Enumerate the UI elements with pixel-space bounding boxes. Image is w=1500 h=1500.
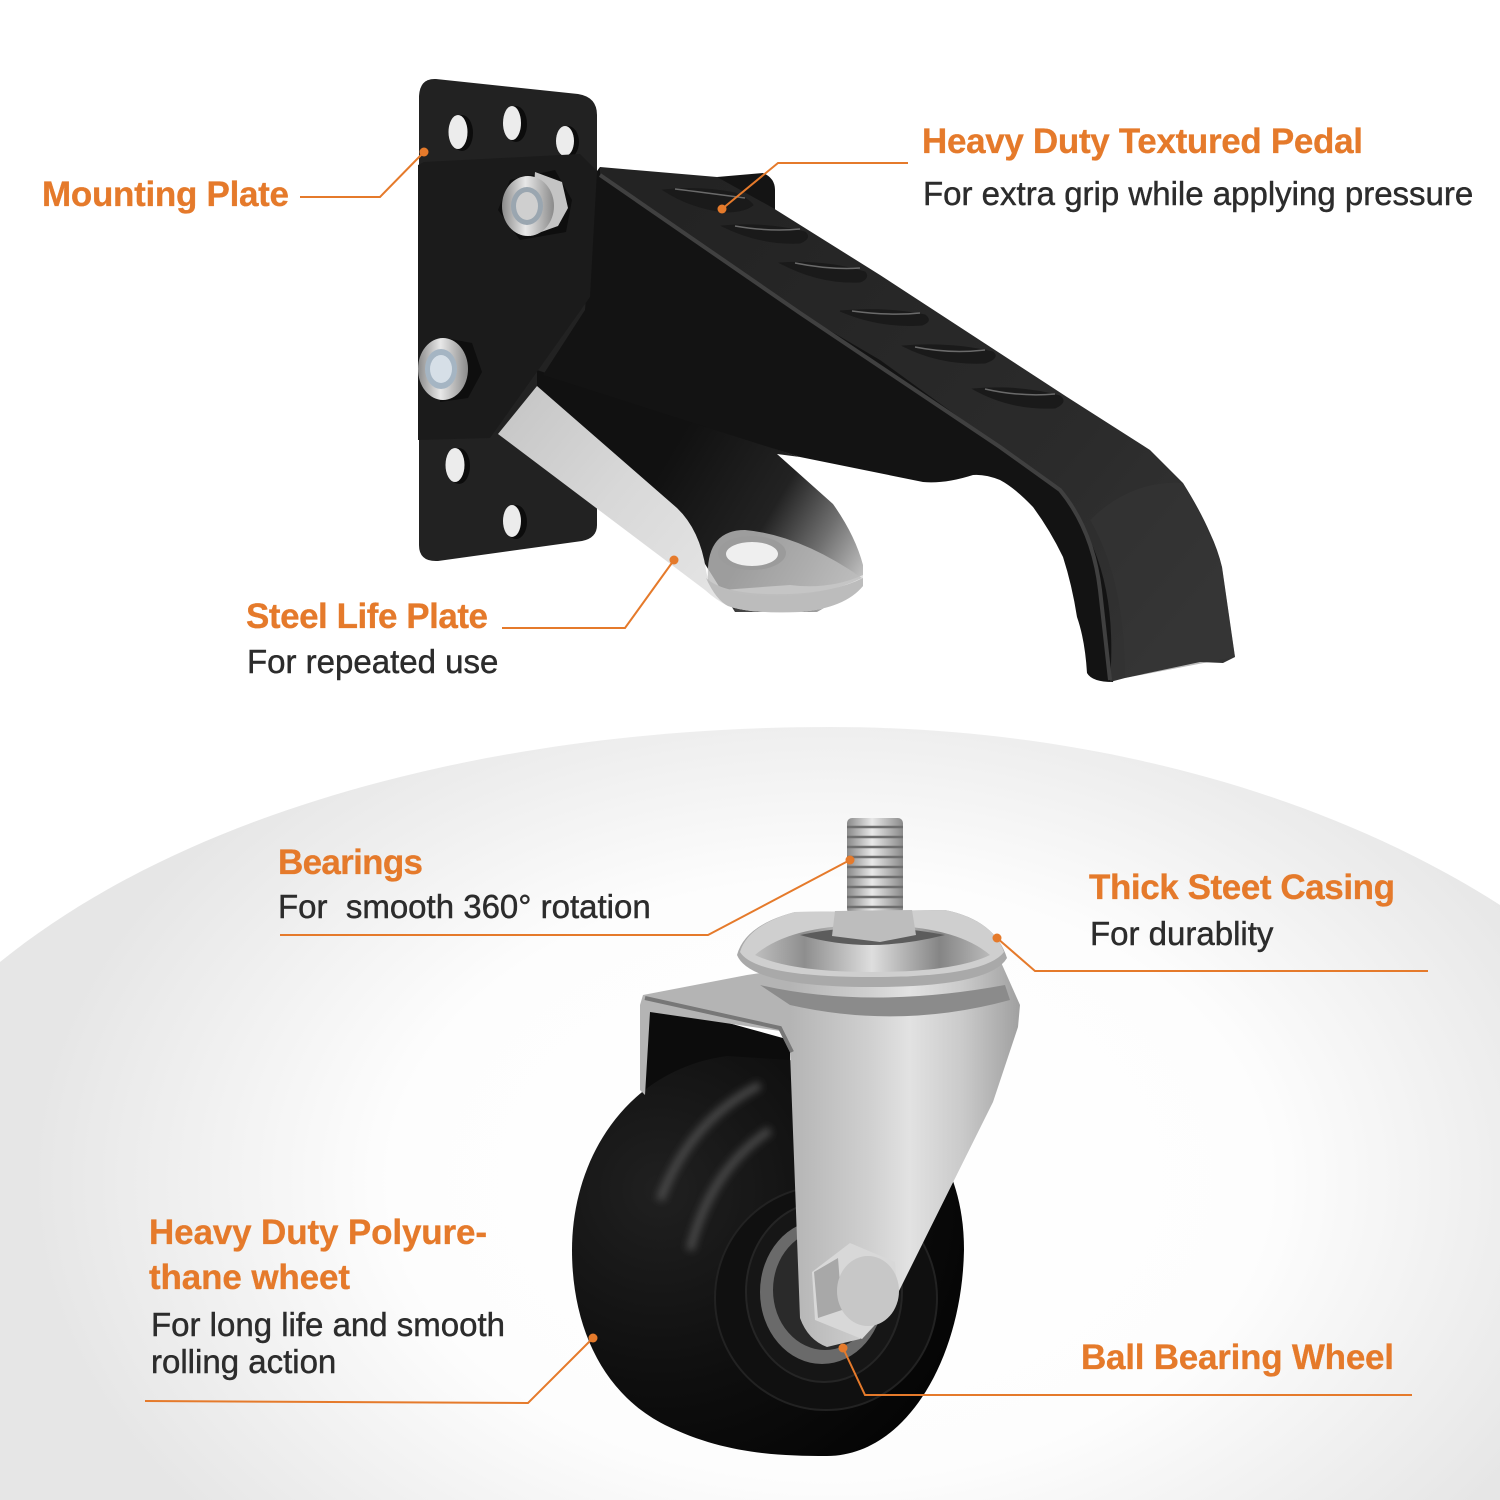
- wheel tyre: [572, 1056, 964, 1456]
- swivel bracket casing: [640, 960, 1020, 1347]
- callout: ball bearing wheel: Ball Bearing Wheel: [1081, 1338, 1394, 1377]
- callout: textured pedal: Heavy Duty Textured Pedal: [922, 122, 1363, 161]
- front plate: [418, 154, 597, 440]
- callout: ball bearing wheel: [838, 1338, 1412, 1395]
- stud thread: [847, 818, 903, 914]
- callout: polyurethane wheel: [145, 1213, 598, 1403]
- pedal end shading: [1090, 483, 1235, 678]
- casing shadow under washer: [760, 985, 1010, 1016]
- tyre highlights: [660, 1085, 770, 1250]
- lift plate tip rim: [706, 578, 863, 612]
- callout: steel casing: Thick Steet Casing: [1089, 868, 1395, 907]
- wheel hub rings: [715, 1186, 937, 1410]
- callout: polyurethane wheel: For long life and smooth: [151, 1306, 505, 1343]
- bracket rear opening: [645, 1000, 790, 1100]
- callout: bearings: Bearings: [278, 843, 423, 882]
- bolt: lower: [418, 338, 482, 402]
- steel lift plate: silver strip: [498, 386, 863, 612]
- stud nut: [832, 910, 916, 942]
- background dome: [0, 727, 1500, 1500]
- illustration: pedal bracket: [418, 79, 1235, 682]
- lift plate eyelet: [708, 530, 862, 596]
- pedal arm: side: [543, 167, 1150, 682]
- callout: polyurethane wheel: rolling action: [151, 1343, 336, 1380]
- axle bolt: [812, 1243, 899, 1339]
- callout: polyurethane wheel: thane wheet: [149, 1258, 350, 1297]
- bolt: upper: [498, 170, 572, 240]
- ridge highlights: [675, 189, 1055, 395]
- pedal ridges: [663, 189, 1063, 408]
- callout: bearings: [278, 843, 854, 935]
- callout: mounting plate: [42, 148, 428, 214]
- mounting plate: [419, 79, 597, 561]
- casing flange edge: [645, 998, 792, 1052]
- callout: polyurethane wheel: Heavy Duty Polyure-: [149, 1213, 487, 1252]
- pedal arm: top face and tip: [600, 167, 1235, 682]
- callout: steel life plate: Steel Life Plate: [246, 597, 488, 636]
- plate holes: [446, 106, 579, 539]
- callout: mounting plate: Mounting Plate: [42, 175, 289, 214]
- rear tab: [717, 173, 775, 210]
- callout: textured pedal: For extra grip while applying pressure: [923, 175, 1473, 212]
- steel lift plate: dark inner: [537, 370, 863, 612]
- callout: steel life plate: [246, 556, 678, 680]
- pedal bend highlight: [600, 175, 1110, 680]
- swivel washer: [737, 910, 1007, 987]
- callout: steel casing: For durablity: [1090, 915, 1274, 952]
- callout: steel casing: [992, 868, 1428, 971]
- callout: steel life plate: For repeated use: [247, 643, 498, 680]
- illustration: caster wheel: [572, 818, 1020, 1456]
- callout: bearings: For smooth 360° rotation: [278, 888, 651, 925]
- callout: textured pedal: [718, 122, 1473, 214]
